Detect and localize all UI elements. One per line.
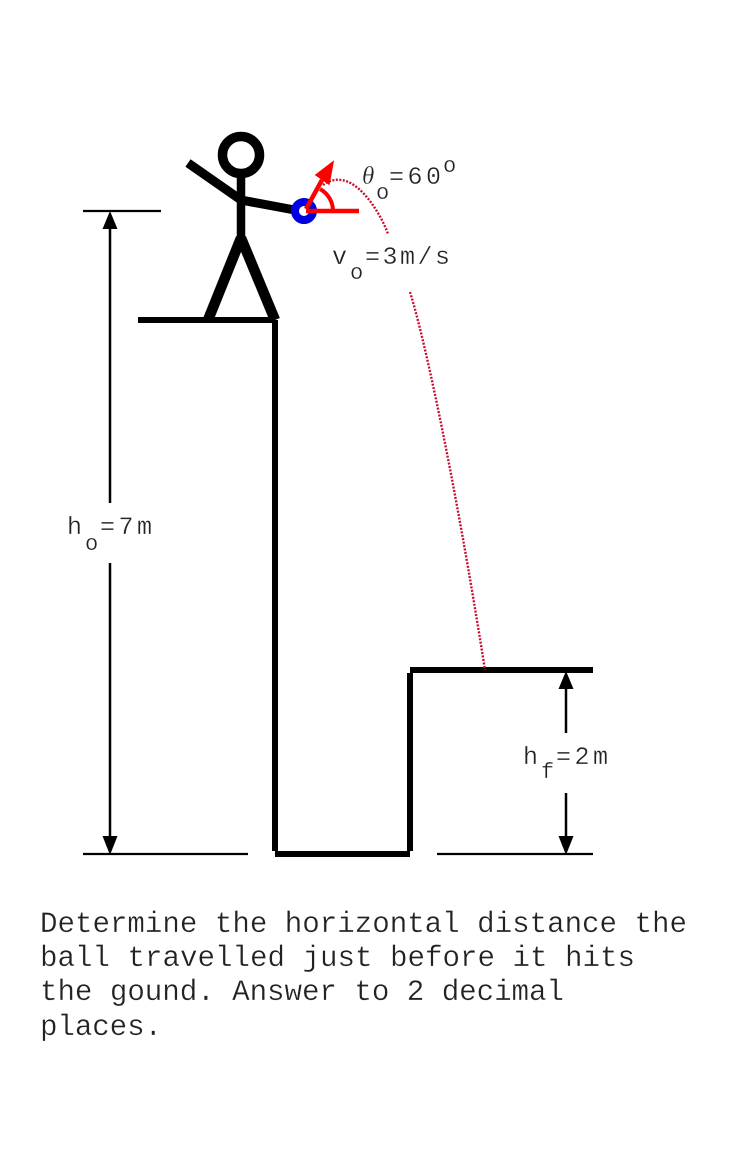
velocity arrow and angle marker	[306, 162, 359, 211]
label: initial height: h	[67, 513, 82, 542]
label: launch angle	[362, 154, 456, 206]
label: initial velocity: v	[332, 243, 347, 272]
question text: Determine the horizontal distance the	[40, 908, 687, 941]
label: initial height: =7m	[100, 513, 152, 542]
label: launch angle: θ	[362, 163, 374, 190]
label: final height	[523, 743, 608, 785]
label: final height: f	[541, 760, 554, 785]
label: launch angle: o	[443, 154, 456, 179]
label: final height: h	[523, 743, 538, 772]
label: initial velocity	[332, 243, 450, 286]
question text: ball travelled just before it hits	[40, 942, 635, 975]
question text: the gound. Answer to 2 decimal	[40, 976, 564, 1009]
question text	[40, 908, 687, 1044]
label: launch angle: o	[376, 181, 389, 206]
trajectory dotted path	[323, 180, 485, 670]
initial height dimension line	[83, 211, 248, 855]
terrain: cliff, pit and ledge	[138, 320, 593, 854]
ball	[295, 202, 313, 220]
stick figure	[188, 136, 300, 320]
question text: places.	[40, 1011, 162, 1044]
label: initial height	[67, 513, 152, 557]
label: initial height: o	[85, 532, 98, 557]
label: launch angle: =60	[389, 163, 441, 192]
final height dimension line	[437, 671, 593, 855]
label: initial velocity: =3m/s	[365, 243, 450, 272]
label: initial velocity: o	[350, 261, 363, 286]
label: final height: =2m	[556, 743, 608, 772]
